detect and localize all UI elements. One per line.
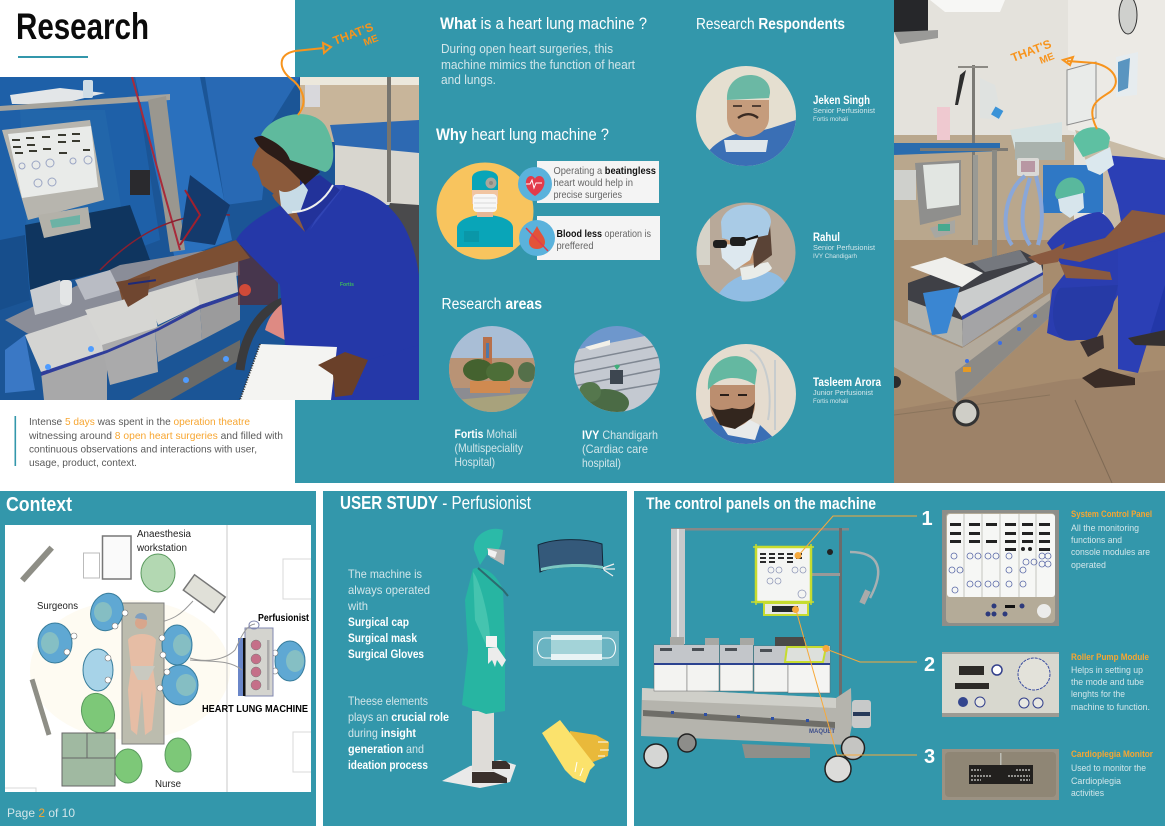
callout: bloodless operation: preffered [556, 240, 594, 252]
icon: surgeon on yellow circle [436, 162, 534, 260]
description: cardioplegia monitor: Used to monitor the [1071, 763, 1146, 774]
text: role of elements: plays an crucial role [348, 710, 449, 724]
heading: control panels: The control panels on the machine [646, 494, 876, 513]
description: system control panel: console modules are [1071, 547, 1150, 558]
label: Fortis Mohali: (Multispeciality [454, 441, 523, 455]
supplies [1010, 122, 1062, 150]
labels: theatre layout: Nurse [155, 779, 181, 790]
photo: team with machine [889, 0, 1165, 483]
page number: Page 2 of 10 [7, 806, 75, 820]
heading: user study: USER STUDY - Perfusionist [340, 493, 531, 513]
number 2: 2 [924, 654, 935, 676]
respondent: Rahul: Rahul [813, 232, 840, 244]
text: surgical equipment: The machine is [348, 567, 422, 581]
image: cardioplegia monitor [942, 749, 1059, 800]
annotation: that's me arrow left [282, 20, 380, 115]
respondent: Tasleem Arora: Junior Perfusionist [813, 388, 874, 397]
icon: gloves [542, 720, 609, 783]
respondent: Tasleem Arora: Fortis mohali [813, 399, 848, 405]
description: cardioplegia monitor: Cardioplegia Monitor [1071, 749, 1153, 760]
text: role of elements: during insight [348, 726, 416, 740]
callout: beatingless heart: heart would help in [554, 177, 633, 189]
photo: IVY hospital [574, 326, 660, 417]
highlighted pump module [785, 647, 826, 662]
respondent: Jeken Singh: Jeken Singh [813, 95, 870, 107]
caption: field work summary: Intense 5 days was spent in the operation theatre [29, 416, 250, 428]
kneeling person [1047, 212, 1120, 341]
text: role of elements: generation and [348, 742, 424, 756]
surgeon shoulders [41, 602, 304, 696]
heading: research areas: Research areas [442, 296, 542, 313]
caption: field work summary: continuous observations and interactions with user, [29, 444, 257, 456]
label: IVY Chandigarh [582, 428, 658, 470]
standing person [1150, 285, 1165, 334]
labels: theatre layout: HEART LUNG MACHINE [202, 704, 308, 715]
nurses [76, 554, 191, 783]
console in photo [915, 160, 961, 225]
instrument table [62, 733, 115, 786]
text: surgical equipment: Surgical cap [348, 615, 409, 629]
labels: theatre layout [37, 529, 310, 790]
description: cardioplegia monitor [1071, 749, 1153, 799]
text: surgical equipment [347, 567, 430, 661]
description: system control panel: functions and [1071, 535, 1122, 546]
machine in photo [894, 293, 1050, 403]
photo: researcher at machine [0, 77, 419, 400]
caption: field work summary [14, 416, 283, 469]
labels: theatre layout: Surgeons [37, 601, 78, 612]
label: Fortis Mohali: Hospital) [454, 455, 495, 469]
text: heart lung machine definition: machine mimics the function of heart [441, 57, 635, 72]
panel: user study [323, 491, 627, 826]
title underline [18, 56, 88, 58]
text: role of elements: Theese elements [348, 694, 428, 708]
description: roller pump module: Roller Pump Module [1071, 652, 1149, 663]
machine modules [5, 245, 240, 335]
respondent: Jeken Singh: Fortis mohali [813, 117, 848, 123]
label: IVY Chandigarh: hospital) [582, 456, 621, 470]
annotation: that's me arrow right: THAT'S [1009, 37, 1053, 65]
text: surgical equipment: always operated [348, 583, 430, 597]
base [641, 688, 852, 745]
title: Research [16, 6, 149, 47]
leader lines [796, 516, 917, 755]
callout: beatingless heart [518, 161, 659, 203]
heading: why heart lung machine: Why heart lung machine ? [436, 126, 609, 144]
description: system control panel: operated [1071, 560, 1106, 571]
respondent: Rahul [813, 232, 876, 260]
surgeons [38, 589, 305, 705]
heart lung machine sketch [245, 628, 273, 696]
portrait: Jeken Singh [696, 66, 796, 166]
label: IVY Chandigarh: IVY Chandigarh [582, 428, 658, 442]
panel: control panels [634, 491, 1165, 826]
respondent: Rahul: Senior Perfusionist [813, 243, 876, 252]
machine illustration [641, 516, 917, 782]
machine illustration: MAQUET [809, 729, 835, 735]
image: roller pump module [942, 652, 1059, 717]
text: surgical equipment: Surgical mask [348, 631, 417, 645]
annotation: that's me arrow left: ME [362, 33, 380, 49]
panel: research background [295, 0, 894, 483]
number 1: 1 [921, 508, 933, 530]
heading: research respondents: Research Respondents [696, 16, 845, 33]
labels: theatre layout: Anaesthesia [137, 529, 191, 540]
pump modules [654, 645, 830, 693]
annotation: that's me arrow right: ME [1038, 51, 1056, 67]
labels: theatre layout: workstation [136, 543, 187, 554]
operating table and patient [122, 603, 164, 744]
description: cardioplegia monitor: Cardioplegia [1071, 776, 1122, 787]
caption: field work summary: usage, product, context. [29, 457, 137, 469]
heading: what is a heart lung machine: What is a heart lung machine ? [440, 15, 647, 33]
annotation: that's me arrow right [1009, 37, 1116, 129]
labels: theatre layout: Perfusionist [258, 613, 310, 624]
text: surgical equipment: Surgical Gloves [348, 647, 424, 661]
person [236, 185, 419, 400]
respondent: Jeken Singh [813, 95, 876, 123]
wheels [678, 734, 696, 752]
blue led row [671, 711, 809, 722]
description: system control panel [1071, 509, 1152, 571]
label: Fortis Mohali: Fortis Mohali [454, 427, 517, 441]
whiteboard and poster [1067, 62, 1096, 125]
portrait: Rahul [696, 202, 796, 302]
icon: surgical cap [538, 540, 615, 576]
respondent: Rahul: IVY Chandigarh [813, 254, 857, 260]
diagram: operating theatre layout [0, 525, 313, 798]
text: heart lung machine definition [441, 41, 635, 87]
photo: Fortis hospital [449, 326, 536, 412]
photo: researcher at machine: Fortis [340, 282, 354, 288]
respondent: Tasleem Arora [813, 377, 882, 405]
lamps [20, 546, 54, 582]
panel: context [0, 491, 316, 826]
description: roller pump module [1071, 652, 1150, 713]
figure: perfusionist in gown [442, 529, 516, 788]
text: surgical equipment: with [347, 599, 368, 613]
description: roller pump module: the mode and tube [1071, 677, 1144, 688]
text: role of elements [348, 694, 449, 772]
text: heart lung machine definition: During open heart surgeries, this [441, 41, 613, 56]
IV stand and bag [972, 65, 975, 245]
heading: context: Context [6, 494, 72, 516]
highlighted system panel [756, 547, 811, 602]
callout: beatingless heart: Operating a beatingless [554, 165, 656, 177]
text: heart lung machine definition: and lungs. [441, 72, 496, 87]
portrait: Tasleem Arora [696, 344, 796, 444]
control panel in photo [2, 120, 104, 220]
description: cardioplegia monitor: activities [1071, 788, 1104, 799]
caption: field work summary: witnessing around 8 open heart surgeries and filled with [28, 430, 283, 442]
callout: bloodless operation: Blood less operation is [556, 228, 651, 240]
description: roller pump module: Helps in setting up [1071, 665, 1143, 676]
label: IVY Chandigarh: (Cardiac care [582, 442, 648, 456]
respondent: Tasleem Arora: Tasleem Arora [813, 377, 882, 389]
number 3: 3 [924, 746, 935, 768]
description: roller pump module: machine to function. [1071, 702, 1150, 713]
label: Fortis Mohali [454, 427, 523, 469]
blue hoses [1006, 176, 1042, 245]
callout: bloodless operation [519, 216, 660, 260]
chair [388, 203, 419, 274]
callout: beatingless heart: precise surgeries [554, 189, 622, 201]
description: system control panel: All the monitoring [1071, 523, 1139, 534]
annotation: that's me arrow left: THAT'S [331, 20, 375, 48]
text: role of elements: ideation process [348, 758, 428, 772]
anaesthesia workstation [102, 536, 131, 579]
respondent: Jeken Singh: Senior Perfusionist [813, 106, 876, 115]
description: roller pump module: lenghts for the [1071, 689, 1125, 700]
icon: surgical mask [533, 631, 619, 666]
image: system control panel [942, 510, 1059, 626]
notebook [240, 344, 337, 400]
